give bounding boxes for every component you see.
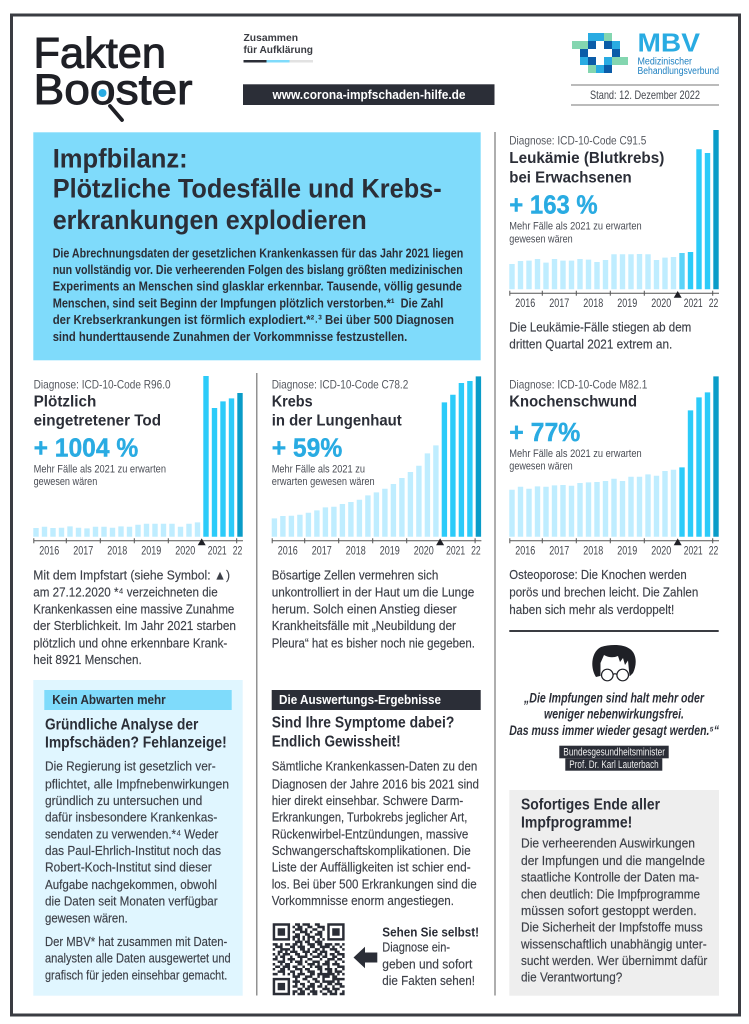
bar chart: 2019 [380, 545, 400, 557]
QR call to action: Diagnose ein- [382, 940, 450, 955]
text block: Robert-Koch-Institut sind dieser [45, 860, 212, 875]
diagnosis heading: eingetretener Tod [34, 413, 161, 430]
bar chart: 2018 [107, 545, 127, 557]
intro text: sind hunderttausende Zunahmen der Vorkommnisse festzustellen. [53, 329, 407, 344]
label bar: Kein Abwarten mehr [52, 693, 166, 707]
logo: MBV wordmark: Medizinischer [638, 57, 693, 68]
quote [509, 690, 719, 738]
chart note [509, 567, 698, 617]
text block: chen deutlich: Die Impfprogramme [521, 886, 700, 901]
chart note: Krankheitsfälle mit „Neubildung der [272, 618, 457, 633]
heading [45, 716, 227, 751]
heading [521, 796, 660, 831]
text block: Liste der Auffälligkeiten ist schier end- [272, 860, 471, 875]
panel: Die Auswertungs-Ergebnisse [272, 690, 481, 994]
bar chart: 2020 [414, 545, 434, 557]
chart note: Osteoporose: Die Knochen werden [509, 567, 687, 582]
arrow [354, 947, 377, 968]
chart note: Krankenkassen eine massive Zunahme [33, 601, 234, 616]
text block: analysten alle Daten ausgewertet und [45, 951, 231, 966]
diagnosis heading [34, 377, 171, 430]
text block: Vorkommnisse enorm angestiegen. [272, 893, 454, 908]
text block: gewesen wären. [45, 910, 128, 925]
bar chart: 22 [233, 545, 242, 557]
chart note: heit 8921 Menschen. [33, 652, 142, 667]
intro text: der Krebserkrankungen ist förmlich explodiert.*²˒³ Bei über 500 Diagnosen [53, 312, 454, 327]
text block: dafür insbesondere Krankenkas- [45, 810, 217, 825]
text block [45, 759, 231, 982]
intro text: Die Abrechnungsdaten der gesetzlichen Krankenkassen für das Jahr 2021 liegen [53, 245, 463, 260]
logo: Fakten Booster [34, 30, 192, 120]
quote: weniger nebenwirkungsfrei. [544, 706, 684, 721]
bar chart: 2020 [651, 298, 671, 310]
bar chart: 2018 [583, 298, 603, 310]
bar chart: 2018 [346, 545, 366, 557]
panel: Knochenschwund [509, 376, 719, 617]
text block: Diagnosen der Jahre 2016 bis 2021 sind [272, 776, 479, 791]
QR call to action: Sehen Sie selbst! [382, 925, 479, 940]
bar chart: 2016 [515, 298, 535, 310]
heading [272, 715, 454, 751]
quote attribution [559, 746, 669, 771]
quote rule [509, 630, 719, 632]
text block: Die Sicherheit der Impfstoffe muss [521, 920, 703, 935]
heading: Sind Ihre Symptome dabei? [272, 715, 454, 732]
bar chart: 2021 [684, 545, 703, 557]
text block: sendaten zu verwenden.*⁴ Weder [45, 826, 219, 841]
chart note: Die Leukämie-Fälle stiegen ab dem [509, 320, 691, 334]
bar chart: 2020 [175, 545, 195, 557]
date line: Stand: 12. Dezember 2022 [590, 88, 700, 102]
percentage: + 1004 % [34, 433, 138, 463]
chart note: porös und brechen leicht. Die Zahlen [509, 585, 698, 600]
panel: Plötzlich eingetretener Tod [33, 376, 243, 667]
caption: Mehr Fälle als 2021 zu erwarten [509, 448, 642, 460]
diagnosis heading: Diagnose: ICD-10-Code M82.1 [509, 377, 648, 391]
bar chart: 2016 [515, 545, 535, 557]
text block: los. Bei über 500 Erkrankungen sind die [272, 876, 477, 891]
chart note: Pleura“ hat es bisher noch nie gegeben. [272, 635, 475, 650]
text block: müssen sofort gestoppt werden. [521, 903, 697, 918]
heading: Sofortiges Ende aller [521, 796, 660, 813]
bar chart: 2016 [39, 545, 59, 557]
QR call to action [382, 925, 479, 988]
logo: Fakten Booster: Fakten [34, 30, 166, 78]
diagnosis heading: Diagnose: ICD-10-Code R96.0 [34, 377, 171, 391]
diagnosis heading [509, 377, 648, 411]
text block: pflichtet, alle Impfnebenwirkungen [45, 776, 229, 791]
bar chart: 2020 [651, 545, 671, 557]
text block: Erkrankungen, Turbokrebs jeglicher Art, [272, 810, 467, 825]
logo: MBV wordmark [638, 28, 719, 77]
panel: Krebs in der Lungenhaut [272, 376, 481, 650]
caption: gewesen wären [34, 476, 97, 488]
heading: Gründliche Analyse der [45, 716, 198, 733]
chart note [509, 320, 691, 352]
caption: Mehr Fälle als 2021 zu [272, 463, 365, 475]
text block: staatliche Kontrolle der Daten ma- [521, 870, 699, 885]
bar chart [509, 130, 719, 310]
bar chart: 2017 [73, 545, 93, 557]
bar chart: 2017 [549, 545, 569, 557]
heading: Impfschäden? Fehlanzeige! [45, 734, 227, 751]
heading: erkrankungen explodieren [53, 205, 367, 235]
bar chart: 22 [709, 545, 718, 557]
bar chart: 22 [471, 545, 481, 557]
percentage: + 59% [272, 433, 342, 463]
chart note: dritten Quartal 2021 extrem an. [509, 336, 672, 352]
bar chart: 2016 [278, 545, 298, 557]
QR call to action: geben und sofort [382, 956, 473, 971]
chart note: haben sich mehr als verdoppelt! [509, 602, 674, 617]
heading: Endlich Gewissheit! [272, 734, 401, 751]
intro text [53, 245, 463, 344]
intro text: nun vollständig vor. Die verheerenden Folgen des bislang größten medizinischen [53, 262, 463, 277]
heading [53, 144, 442, 235]
text block: Aufgabe nachgekommen, obwohl [45, 877, 217, 892]
caption: Mehr Fälle als 2021 zu erwarten [509, 221, 642, 233]
text block: Die verheerenden Auswirkungen [521, 835, 695, 850]
caption: erwarten gewesen wären [272, 476, 375, 488]
bar chart: 2019 [617, 298, 637, 310]
diagnosis heading [509, 133, 664, 186]
slogan: Zusammen für Aufklärung [244, 32, 313, 62]
text block: das Paul-Ehrlich-Institut noch das [45, 843, 221, 858]
chart note: herum. Solch einen Anstieg dieser [272, 601, 457, 616]
bar chart: 2017 [312, 545, 332, 557]
bar chart: 2019 [617, 545, 637, 557]
text block: Rückenwirbel-Entzündungen, massive [272, 826, 468, 841]
chart note: der Sterblichkeit. Im Jahr 2021 starben [33, 618, 236, 633]
website URL bar [243, 84, 494, 105]
text block: wissenschaftlich unabhängig unter- [520, 936, 707, 951]
bar chart [33, 376, 243, 557]
text block: die Daten seit Monaten verfügbar [45, 894, 218, 909]
heading: Impfbilanz: [53, 144, 188, 174]
diagnosis heading: Leukämie (Blutkrebs) [509, 150, 664, 167]
caption [34, 463, 166, 488]
text block [520, 835, 708, 985]
diagnosis heading: Krebs [272, 394, 313, 411]
bar chart: 2021 [208, 545, 227, 557]
bar chart [272, 376, 481, 557]
diagnosis heading: in der Lungenhaut [272, 413, 402, 430]
chart note: plötzlich und ohne erkennbare Krank- [33, 635, 227, 650]
QR call to action: die Fakten sehen! [382, 973, 475, 988]
bar chart: 2021 [446, 545, 465, 557]
text block: hier direkt einsehbar. Schwere Darm- [272, 793, 463, 808]
diagnosis heading [272, 377, 409, 430]
panel: Sofortiges Ende aller Impfprogramme [509, 790, 719, 996]
caption: gewesen wären [509, 461, 573, 473]
diagnosis heading: bei Erwachsenen [509, 169, 632, 186]
chart note [33, 567, 236, 667]
intro text: Experiments an Menschen sind glasklar erkennbar. Tausende, völlig gesunde [53, 279, 462, 294]
logo: MBV wordmark: MBV [638, 28, 701, 58]
quote attribution: Prof. Dr. Karl Lauterbach [569, 759, 659, 771]
panel: hero headline [33, 132, 481, 360]
panel: Leukämie [509, 130, 719, 352]
percentage: + 163 % [509, 189, 598, 219]
caption: gewesen wären [509, 233, 573, 245]
column dividers [256, 132, 496, 996]
chart note: Bösartige Zellen vermehren sich [272, 567, 438, 582]
label bar: Die Auswertungs-Ergebnisse [279, 693, 441, 707]
quote: „Die Impfungen sind halt mehr oder [523, 690, 705, 705]
logo: MBV cross icon [572, 33, 628, 73]
intro text: Menschen, sind seit Beginn der Impfungen plötzlich verstorben.*¹ Die Zahl [53, 295, 443, 310]
panel: Kein Abwarten mehr [33, 680, 243, 996]
text block [272, 759, 479, 908]
bar chart: 2021 [684, 298, 703, 310]
caption [509, 448, 642, 473]
bar chart: 2018 [583, 545, 603, 557]
diagnosis heading: Plötzlich [34, 394, 96, 411]
caption [272, 463, 375, 488]
label bar [44, 690, 232, 710]
text block: die Verantwortung? [521, 970, 622, 985]
heading: Plötzliche Todesfälle und Krebs- [53, 174, 442, 204]
text block: gründlich zu untersuchen und [45, 793, 202, 808]
bar chart [509, 376, 719, 557]
chart note [272, 567, 475, 650]
text block: der Impfungen und die mangelnde [521, 853, 705, 868]
text block: Schwangerschaftskomplikationen. Die [272, 843, 471, 858]
text block: sucht werden. Wer übernimmt dafür [521, 953, 708, 968]
heading: Impfprogramme! [521, 814, 632, 831]
label bar [272, 690, 481, 710]
diagnosis heading: Diagnose: ICD-10-Code C91.5 [509, 133, 647, 147]
text block: Der MBV* hat zusammen mit Daten- [45, 934, 227, 949]
diagnosis heading: Knochenschwund [509, 394, 637, 411]
caption: Mehr Fälle als 2021 zu erwarten [34, 463, 166, 475]
chart note: am 27.12.2020 *⁴ verzeichneten die [33, 585, 218, 600]
logo: Fakten Booster: Booster [34, 66, 192, 114]
text block: Die Regierung ist gesetzlich ver- [45, 759, 216, 774]
quote attribution: Bundesgesundheitsminister [563, 746, 665, 758]
QR code [273, 925, 345, 994]
slogan: Zusammen für Aufklärung: für Aufklärung [244, 44, 313, 56]
bar chart: 22 [709, 298, 718, 310]
website URL bar: www.corona-impfschaden-hilfe.de [272, 88, 466, 102]
logo: MBV wordmark: Behandlungsverbund [638, 66, 719, 77]
percentage: + 77% [509, 417, 580, 447]
slogan: Zusammen für Aufklärung: Zusammen [244, 32, 298, 44]
bar chart: 2019 [141, 545, 161, 557]
icon: face with glasses [592, 645, 636, 681]
bar chart: 2017 [549, 298, 569, 310]
text block: Sämtliche Krankenkassen-Daten zu den [272, 759, 477, 774]
chart note: Mit dem Impfstart (siehe Symbol: ▲) [33, 567, 230, 582]
caption [509, 221, 642, 245]
text block: grafisch für jeden einsehbar gemacht. [45, 967, 227, 982]
chart note: unkontrolliert in der Haut um die Lunge [272, 585, 474, 600]
diagnosis heading: Diagnose: ICD-10-Code C78.2 [272, 377, 409, 391]
